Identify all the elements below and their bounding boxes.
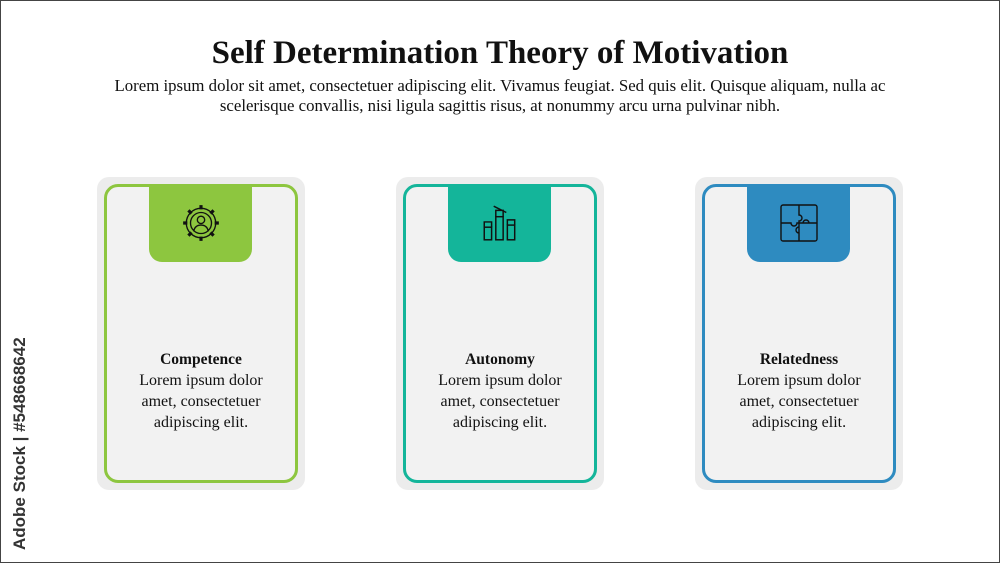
text: relatedness: amet, consectetuer bbox=[739, 393, 859, 410]
panel: autonomy bbox=[396, 177, 604, 490]
icon: raised fists bbox=[448, 184, 551, 262]
text: competence: Competence bbox=[160, 351, 242, 368]
icon: gear person bbox=[149, 184, 252, 262]
text: relatedness: Relatedness bbox=[760, 351, 838, 368]
subtitle text: Lorem ipsum dolor sit amet, consectetuer adipiscing elit. Vivamus feugiat. Sed quis elit. Quisque aliquam, nulla ac scelerisque convallis, nisi ligula sagittis risus, at nonummy arcu urna pulvinar nibh. bbox=[115, 76, 885, 115]
text: autonomy: Autonomy bbox=[465, 351, 535, 368]
panel: relatedness bbox=[695, 177, 903, 490]
panel: competence bbox=[97, 177, 305, 490]
text: autonomy: adipiscing elit. bbox=[453, 414, 547, 431]
title: Self Determination Theory of Motivation bbox=[212, 35, 788, 71]
text: relatedness bbox=[737, 351, 861, 431]
text: autonomy: Lorem ipsum dolor bbox=[438, 372, 562, 389]
watermark text: Adobe Stock | #548668642 bbox=[10, 337, 29, 550]
text: competence: adipiscing elit. bbox=[154, 414, 248, 431]
text: autonomy: amet, consectetuer bbox=[440, 393, 560, 410]
icon: puzzle bbox=[747, 184, 850, 262]
text: relatedness: Lorem ipsum dolor bbox=[737, 372, 861, 389]
text: competence bbox=[139, 351, 263, 431]
text: autonomy bbox=[438, 351, 562, 431]
text: competence: Lorem ipsum dolor bbox=[139, 372, 263, 389]
text: competence: amet, consectetuer bbox=[141, 393, 261, 410]
text: relatedness: adipiscing elit. bbox=[752, 414, 846, 431]
